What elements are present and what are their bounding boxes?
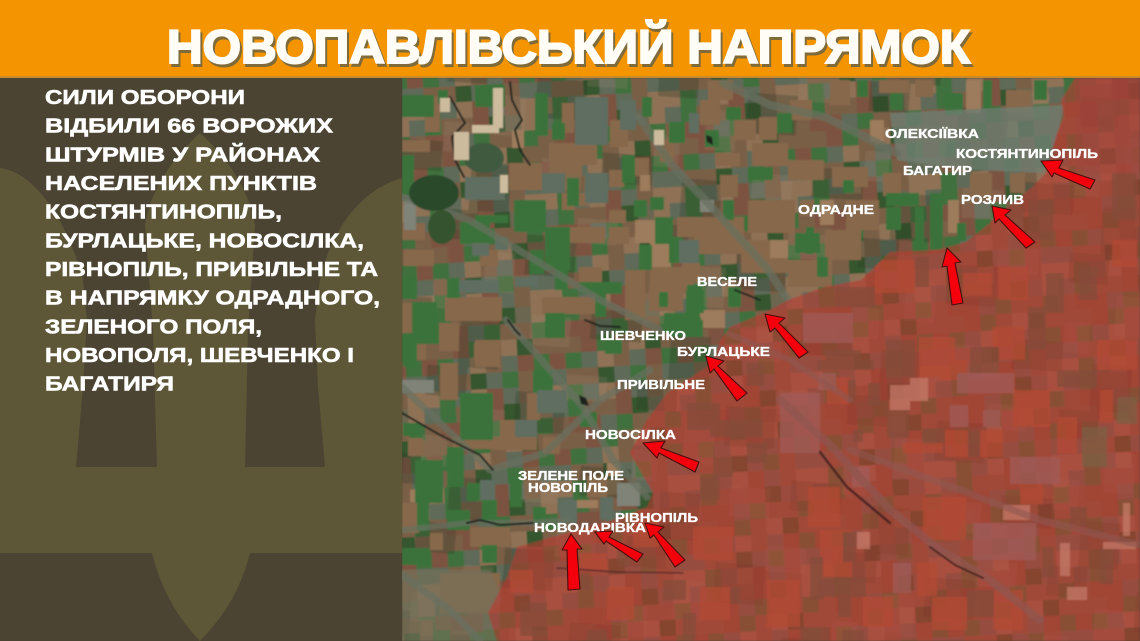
map labels: settlement names: ОЛЕКСІЇВКА — [885, 126, 980, 141]
text block: defence forces summary: БУРЛАЦЬКЕ, НОВОСІЛКА, — [45, 230, 364, 252]
text block: defence forces summary: В НАПРЯМКУ ОДРАДНОГО, — [45, 288, 380, 310]
map labels: settlement names: ВЕСЕЛЕ — [697, 274, 757, 289]
text block: defence forces summary: БАГАТИРЯ — [45, 374, 174, 396]
title: НОВОПАВЛІВСЬКИЙ НАПРЯМОК — [169, 23, 972, 76]
icon: trident emblem watermark — [0, 133, 402, 641]
text block: defence forces summary: СИЛИ ОБОРОНИ — [45, 87, 245, 109]
map labels: settlement names — [518, 126, 1098, 535]
text block: defence forces summary: РІВНОПІЛЬ, ПРИВІЛЬНЕ ТА — [45, 259, 378, 281]
map labels: settlement names: РОЗЛИВ — [961, 192, 1024, 207]
map: occupied red zone — [488, 78, 1140, 641]
text block: defence forces summary: ЗЕЛЕНОГО ПОЛЯ, — [45, 316, 262, 338]
map labels: settlement names: КОСТЯНТИНОПІЛЬ — [956, 146, 1098, 161]
map labels: settlement names: НОВОСІЛКА — [585, 427, 677, 442]
map labels: settlement names: НОВОДАРІВКА — [534, 520, 647, 535]
map labels: settlement names: БАГАТИР — [903, 163, 972, 178]
text block: defence forces summary: НАСЕЛЕНИХ ПУНКТІВ — [45, 173, 317, 195]
map: satellite terrain with occupied zone — [402, 78, 1140, 641]
text block: defence forces summary: ШТУРМІВ У РАЙОНАХ — [45, 142, 321, 166]
map labels: settlement names: ПРИВІЛЬНЕ — [617, 377, 705, 392]
map labels: settlement names: БУРЛАЦЬКЕ — [677, 344, 770, 359]
panel: left text panel — [0, 78, 402, 641]
map labels: settlement names: НОВОПІЛЬ — [528, 480, 608, 495]
map labels: settlement names: ШЕВЧЕНКО — [600, 328, 686, 343]
map labels: settlement names: РІВНОПІЛЬ — [615, 510, 698, 525]
arrows: red attack directions — [562, 160, 1095, 590]
map labels: settlement names: ОДРАДНЕ — [798, 202, 874, 217]
title: НОВОПАВЛІВСЬКИЙ НАПРЯМОК — [167, 20, 970, 73]
map: terrain, settlements and vegetation belts — [402, 82, 1064, 641]
text block: defence forces summary: ВІДБИЛИ 66 ВОРОЖИХ — [45, 116, 334, 138]
header: orange title bar — [0, 0, 1140, 78]
text block: defence forces summary: КОСТЯНТИНОПІЛЬ, — [45, 202, 282, 224]
text block: defence forces summary — [45, 87, 380, 396]
text block: defence forces summary: НОВОПОЛЯ, ШЕВЧЕНКО І — [45, 345, 354, 367]
map: farmland fields — [402, 78, 1140, 641]
map labels: settlement names: ЗЕЛЕНЕ ПОЛЕ — [518, 468, 624, 483]
